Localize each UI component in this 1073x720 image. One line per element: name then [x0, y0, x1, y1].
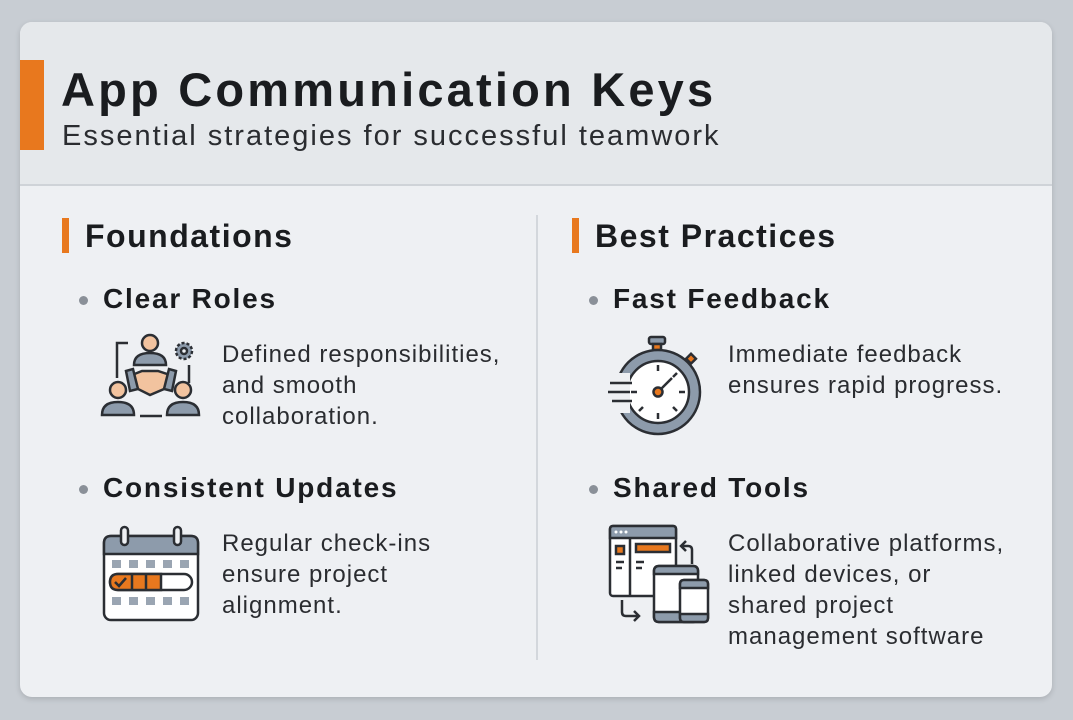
text [728, 530, 1004, 650]
text: Regular check-ins [222, 530, 431, 557]
text: linked devices, or [728, 561, 931, 588]
header [20, 22, 1052, 186]
icon: stopwatch [608, 336, 702, 436]
text: shared project [728, 592, 894, 619]
title: App Communication Keys [61, 63, 716, 116]
item: shared tools: Shared Tools [613, 472, 810, 503]
text: ensures rapid progress. [728, 372, 1003, 399]
panel: best practices [572, 218, 1004, 650]
text [222, 341, 500, 430]
text: Defined responsibilities, [222, 341, 500, 368]
item: fast feedback: Fast Feedback [613, 283, 831, 314]
text: Immediate feedback [728, 341, 962, 368]
item: shared tools [589, 472, 1004, 650]
heading: Foundations: Foundations [85, 218, 293, 254]
item: consistent updates: Consistent Updates [103, 472, 398, 503]
divider [536, 215, 538, 660]
item: consistent updates [79, 472, 431, 622]
icon: calendar progress [102, 526, 200, 622]
text: collaboration. [222, 403, 379, 430]
item: clear roles [79, 283, 500, 430]
accent bar [20, 60, 44, 150]
text [222, 530, 431, 619]
heading: Best Practices: Best Practices [595, 218, 837, 254]
text: management software [728, 623, 984, 650]
text [728, 341, 1003, 399]
text: alignment. [222, 592, 343, 619]
icon: team handshake [100, 334, 200, 418]
panel: foundations [62, 218, 500, 622]
text: and smooth [222, 372, 357, 399]
item: fast feedback [589, 283, 1003, 436]
icon: devices [608, 524, 710, 624]
item: clear roles: Clear Roles [103, 283, 277, 314]
subtitle: Essential strategies for successful teamwork [62, 120, 721, 152]
text: Collaborative platforms, [728, 530, 1004, 557]
text: ensure project [222, 561, 388, 588]
